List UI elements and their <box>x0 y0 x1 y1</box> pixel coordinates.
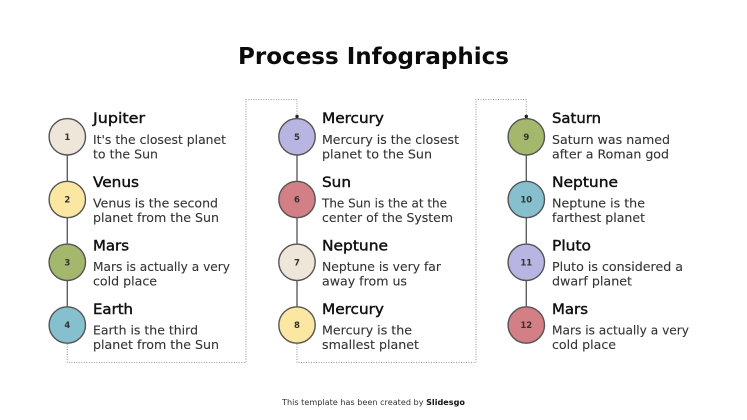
step 8: Mercury: Mercury <box>322 302 384 318</box>
step 11: Pluto: 11 <box>520 258 532 268</box>
step 9: Saturn: after a Roman god <box>552 148 669 162</box>
step 5: Mercury: 5 <box>294 133 300 143</box>
step 4: Earth: Earth <box>93 302 133 318</box>
step 3: Mars: Mars <box>93 238 129 254</box>
step 11: Pluto <box>508 238 683 289</box>
connector: column 2 to column 3 <box>297 100 528 362</box>
step 4: Earth: Earth is the third <box>93 324 198 338</box>
title: Process Infographics <box>238 44 509 70</box>
step 5: Mercury: Mercury is the closest <box>322 133 459 147</box>
step 11: Pluto: dwarf planet <box>552 275 632 289</box>
step 8: Mercury: smallest planet <box>322 338 419 352</box>
step 8: Mercury <box>279 302 419 352</box>
step 7: Neptune: Neptune is very far <box>322 260 442 274</box>
footer credit: This template has been created by Slidesgo <box>281 398 465 407</box>
step 3: Mars: cold place <box>93 275 157 289</box>
step 3: Mars: Mars is actually a very <box>93 260 230 274</box>
step 12: Mars: Mars <box>552 302 588 318</box>
step 4: Earth: 4 <box>64 321 70 331</box>
step 7: Neptune: 7 <box>294 258 300 268</box>
step 10: Neptune: Neptune <box>552 175 618 191</box>
step 6: Sun: center of the System <box>322 211 453 225</box>
step 10: Neptune: 10 <box>520 196 532 206</box>
step 10: Neptune: Neptune is the <box>552 196 645 210</box>
step 9: Saturn: Saturn <box>552 111 601 127</box>
step 12: Mars: cold place <box>552 338 616 352</box>
step 5: Mercury: Mercury <box>322 111 384 127</box>
step 6: Sun: Sun <box>322 175 351 191</box>
step 6: Sun: 6 <box>294 196 300 206</box>
step 12: Mars: 12 <box>520 321 532 331</box>
step 10: Neptune <box>508 175 645 225</box>
step 2: Venus: Venus <box>93 175 139 191</box>
panel: column 1 <box>49 111 230 352</box>
step 12: Mars: Mars is actually a very <box>552 324 689 338</box>
step 9: Saturn: 9 <box>523 133 529 143</box>
step 5: Mercury <box>279 111 459 162</box>
step 6: Sun: The Sun is the at the <box>321 196 447 210</box>
step 2: Venus: planet from the Sun <box>93 211 219 225</box>
step 8: Mercury: 8 <box>294 321 300 331</box>
step 1: Jupiter: to the Sun <box>93 148 158 162</box>
connector: column 1 to column 2 <box>67 100 299 362</box>
step 1: Jupiter: 1 <box>64 133 70 143</box>
step 8: Mercury: Mercury is the <box>322 324 412 338</box>
step 5: Mercury: planet to the Sun <box>322 148 432 162</box>
step 11: Pluto: Pluto <box>552 238 591 254</box>
step 7: Neptune <box>279 238 442 289</box>
step 2: Venus: Venus is the second <box>93 196 218 210</box>
step 3: Mars <box>49 238 230 289</box>
step 12: Mars <box>508 302 689 352</box>
step 1: Jupiter <box>49 111 226 162</box>
step 9: Saturn <box>508 111 670 162</box>
step 10: Neptune: farthest planet <box>552 211 645 225</box>
panel: column 3 <box>508 111 689 352</box>
step 7: Neptune: Neptune <box>322 238 388 254</box>
step 7: Neptune: away from us <box>322 275 407 289</box>
step 11: Pluto: Pluto is considered a <box>552 260 683 274</box>
step 2: Venus: 2 <box>64 196 70 206</box>
step 1: Jupiter: Jupiter <box>92 111 145 127</box>
step 3: Mars: 3 <box>64 258 70 268</box>
step 4: Earth: planet from the Sun <box>93 338 219 352</box>
panel: column 2 <box>279 111 459 352</box>
step 4: Earth <box>49 302 219 352</box>
step 1: Jupiter: It's the closest planet <box>93 133 226 147</box>
step 2: Venus <box>49 175 219 225</box>
step 6: Sun <box>279 175 453 225</box>
step 9: Saturn: Saturn was named <box>552 133 670 147</box>
